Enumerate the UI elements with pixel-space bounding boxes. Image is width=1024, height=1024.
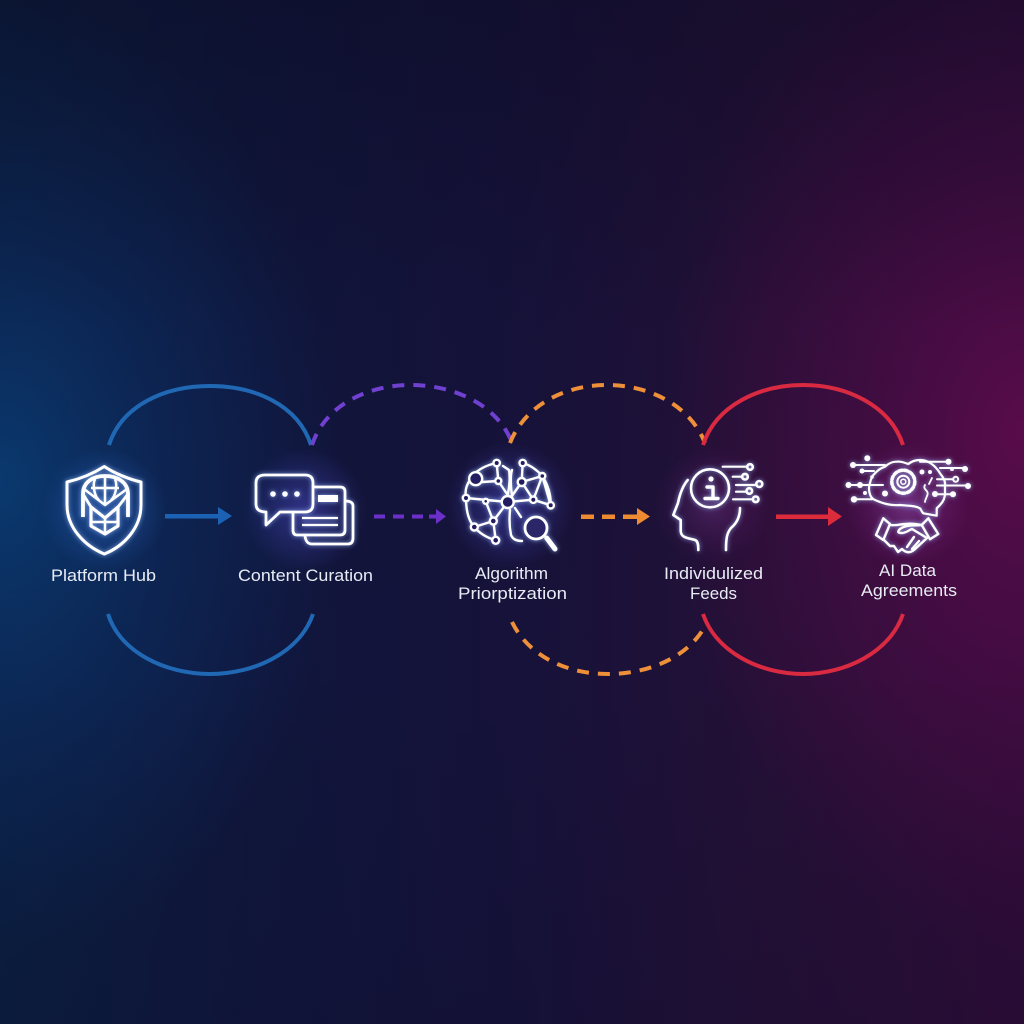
- arc: purple dashed top: [312, 385, 512, 445]
- label: Individulized Feeds: [664, 565, 763, 603]
- icon: chat and documents: [242, 448, 366, 572]
- arc: red bottom: [703, 614, 903, 674]
- label: Algorithm Priorptization: Algorithm: [475, 565, 548, 583]
- arc: orange dashed top: [510, 385, 705, 443]
- label: Algorithm Priorptization: [458, 565, 567, 603]
- icon: AI brain and handshake: [846, 443, 971, 567]
- label: AI Data Agreements: Agreements: [861, 582, 957, 600]
- label: Content Curation: Content Curation: [238, 567, 373, 585]
- label: Platform Hub: Platform Hub: [51, 567, 156, 585]
- arc: orange dashed bottom: [512, 622, 707, 674]
- label: AI Data Agreements: AI Data: [879, 562, 937, 580]
- label: AI Data Agreements: [861, 562, 957, 600]
- label: Algorithm Priorptization: Priorptization: [458, 585, 567, 603]
- arrow: blue: [165, 507, 232, 525]
- arrow: purple dashed: [374, 509, 446, 524]
- arrow: orange dashed: [581, 508, 650, 525]
- label: Individulized Feeds: Individulized: [664, 565, 763, 583]
- arrow: red: [776, 507, 842, 526]
- label: Individulized Feeds: Feeds: [690, 585, 737, 603]
- icon: neural brain with magnifier: [446, 441, 574, 569]
- arc: blue bottom: [108, 614, 313, 674]
- icon: shield platform hub: [42, 448, 166, 572]
- arc: red top: [703, 385, 903, 445]
- arc: blue top: [109, 386, 311, 445]
- icon: head with info: [654, 447, 770, 563]
